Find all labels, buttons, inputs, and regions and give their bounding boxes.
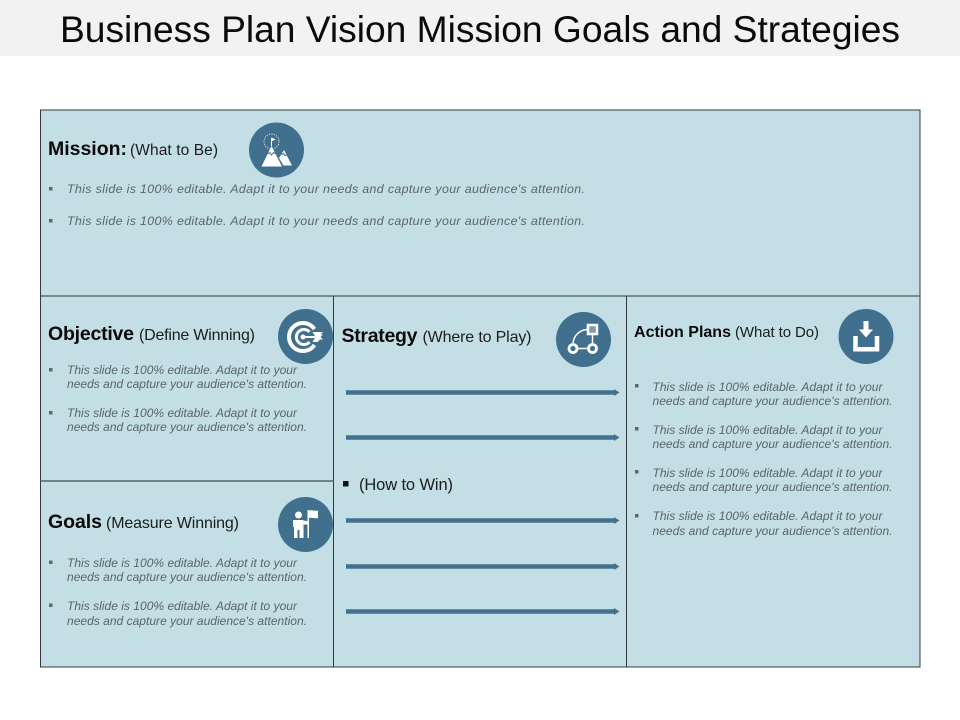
action plans bullets: needs and capture your audience's attention. [652, 394, 892, 408]
objective bullets: needs and capture your audience's attention. [67, 377, 307, 391]
arrow 2 [346, 434, 620, 441]
title [0, 0, 960, 56]
objective heading: (Define Winning) [139, 327, 255, 344]
mission heading: (What to Be) [130, 142, 218, 159]
panel: mission [40, 110, 920, 296]
objective bullets: This slide is 100% editable. Adapt it to your [67, 363, 298, 377]
mission bullets [49, 182, 585, 228]
action plans bullets: needs and capture your audience's attention. [652, 524, 892, 538]
goals bullets: needs and capture your audience's attention. [67, 570, 307, 584]
mission heading: Mission: [48, 138, 127, 160]
action plans bullets: This slide is 100% editable. Adapt it to your [652, 509, 884, 523]
goals heading: Goals [48, 511, 102, 533]
mission bullets: This slide is 100% editable. Adapt it to your needs and capture your audience's attention. [67, 182, 585, 196]
arrow 4 [346, 563, 620, 570]
strategy heading: Strategy [342, 325, 418, 347]
goals heading: (Measure Winning) [106, 515, 239, 532]
icon: target with arrow [278, 309, 333, 364]
action plans bullets: This slide is 100% editable. Adapt it to your [652, 380, 884, 394]
objective bullets: needs and capture your audience's attention. [67, 420, 307, 434]
goals bullets: This slide is 100% editable. Adapt it to your [67, 556, 298, 570]
action plans heading: Action Plans [634, 324, 731, 341]
arrow 3 [346, 517, 620, 524]
arrow 5 [346, 608, 620, 615]
objective heading [48, 323, 255, 345]
objective bullets [49, 363, 307, 434]
panel: objective [40, 296, 334, 481]
action plans heading [634, 324, 819, 341]
icon: download tray [838, 309, 894, 364]
goals heading [48, 511, 239, 533]
how to win label: (How to Win) [359, 476, 453, 494]
action plans bullets: This slide is 100% editable. Adapt it to your [652, 423, 884, 437]
objective bullets: This slide is 100% editable. Adapt it to your [67, 406, 298, 420]
objective heading: Objective [48, 323, 134, 345]
goals bullets [49, 556, 307, 628]
action plans bullets: This slide is 100% editable. Adapt it to your [652, 466, 884, 480]
title: Business Plan Vision Mission Goals and Strategies [60, 8, 900, 50]
mission bullets: This slide is 100% editable. Adapt it to your needs and capture your audience's attention. [67, 214, 585, 228]
arrow 1 [346, 389, 620, 396]
goals bullets: This slide is 100% editable. Adapt it to your [67, 599, 298, 613]
icon: workflow nodes [556, 312, 611, 367]
panel: goals [40, 481, 334, 667]
strategy heading: (Where to Play) [422, 329, 532, 346]
panel: action plans [626, 296, 920, 667]
icon: person with flag [278, 497, 333, 552]
action plans bullets: needs and capture your audience's attention. [652, 437, 892, 451]
action plans bullets [635, 380, 892, 538]
mission heading [48, 138, 218, 160]
icon: mountain with flag [249, 122, 304, 178]
action plans bullets: needs and capture your audience's attention. [652, 480, 892, 494]
goals bullets: needs and capture your audience's attention. [67, 614, 307, 628]
action plans heading: (What to Do) [735, 324, 819, 341]
panel: strategy [334, 296, 626, 667]
strategy heading [342, 325, 532, 347]
